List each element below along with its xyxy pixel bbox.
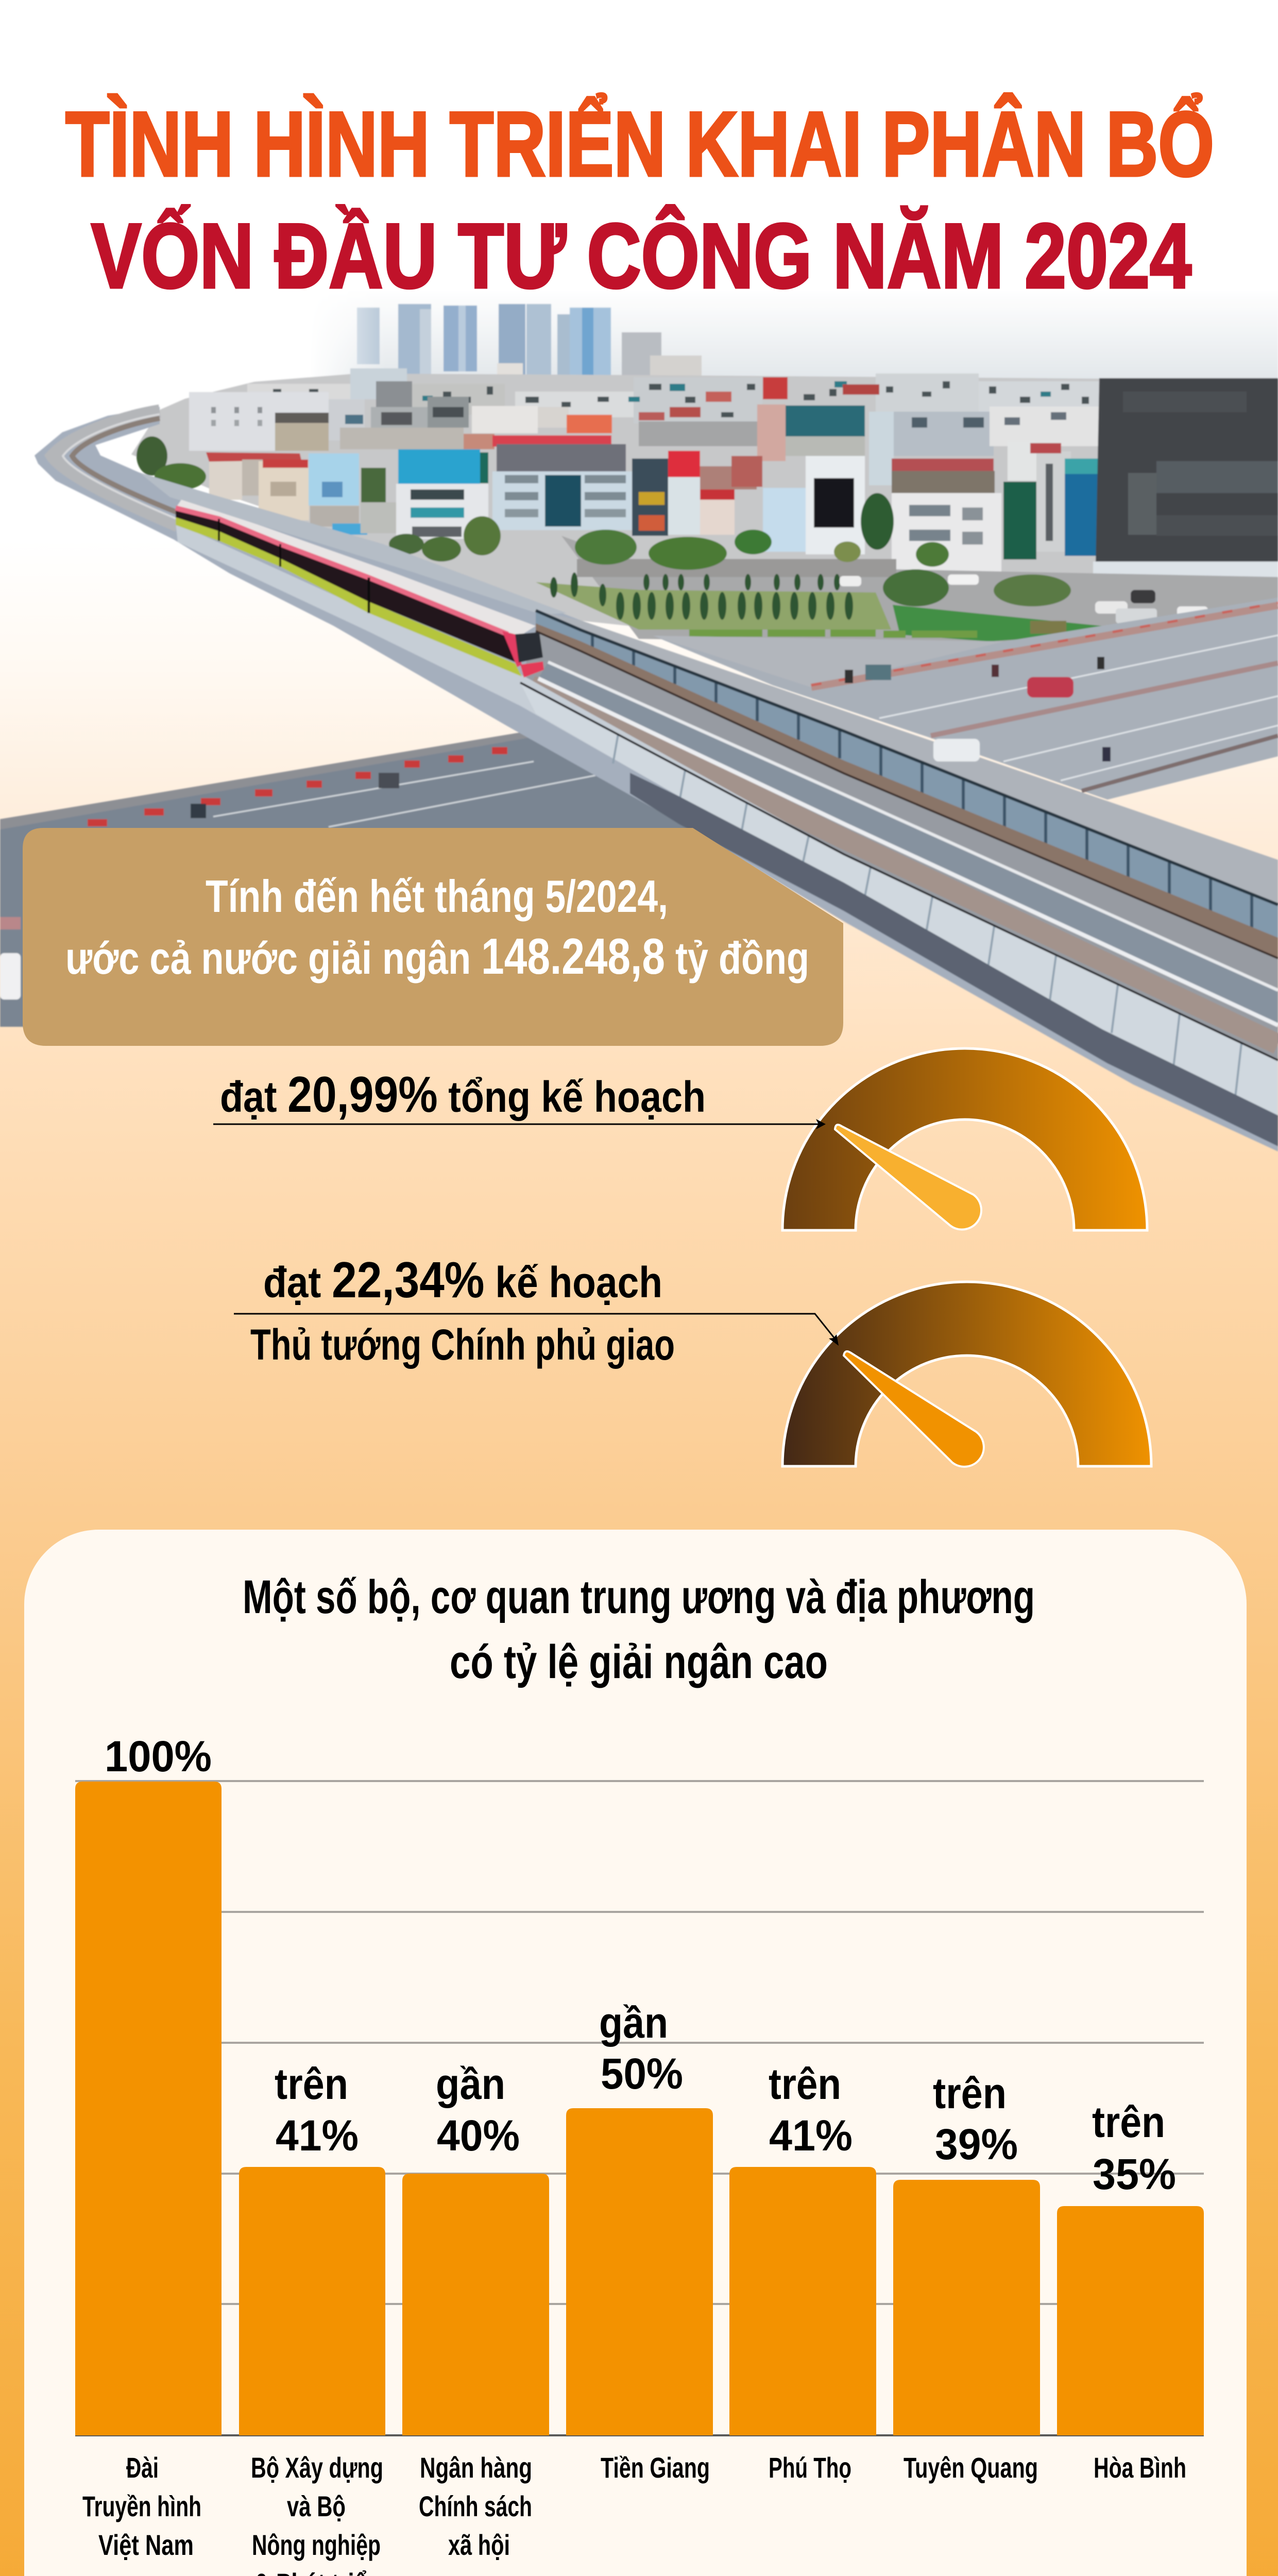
walkway [536,611,1278,905]
bar value labels: 41% [276,2111,359,2160]
bar category labels: Chính sách [419,2490,532,2522]
background blocks [350,368,407,399]
bar chart [75,1782,1204,2435]
gauge 1: 20,99%: đạt 20,99% tổng kế hoạch [220,1066,706,1123]
panel heading: có tỷ lệ giải ngân cao [450,1636,828,1688]
bar value labels [105,1732,1176,2198]
viaduct structure [35,407,1278,1151]
van on viaduct [933,739,980,761]
bar category labels: Tuyên Quang [904,2451,1038,2484]
lawn [536,582,891,630]
grey roof building [492,435,611,447]
bar category labels: Ngân hàng [420,2451,532,2484]
bar value labels: 41% [769,2111,853,2160]
summary text: Tính đến hết tháng 5/2024, [206,871,668,922]
bar value labels: gần [599,1998,668,2047]
bar value labels: trên [275,2060,348,2108]
bar category labels: Việt Nam [98,2529,194,2561]
metro train [176,500,544,677]
gauge 1: 20,99% [213,1048,1147,1230]
grid lines [75,1781,1204,2304]
street trees [464,516,501,555]
sky [309,289,1278,389]
summary text: ước cả nước giải ngân 148.248,8 tỷ đồng [65,928,809,985]
bar value labels: trên [933,2069,1007,2117]
bar category labels [82,2451,1186,2576]
right road [653,598,1278,800]
dark lower band [630,773,1278,1146]
upper window panels [536,611,1278,938]
bar value labels: 100% [105,1732,212,1781]
billboard light blue [309,453,359,505]
bar value labels: 39% [935,2120,1018,2168]
bar value labels: gần [436,2060,505,2108]
centre strip [632,459,668,536]
bar category labels: Hòa Bình [1094,2451,1186,2484]
left road under viaduct [0,732,693,1027]
left white buildings [189,392,329,451]
bar category labels: Tiền Giang [601,2451,710,2484]
low red-roof houses [209,457,242,500]
bar category labels: Phú Thọ [769,2451,851,2484]
black line [520,683,1278,1060]
panel heading [243,1571,1035,1688]
gauge 2: 22,34% [234,1251,1151,1467]
bar value labels: 40% [437,2111,520,2160]
ground [561,536,1278,644]
summary text [65,871,809,985]
bar category labels: Đài [126,2451,159,2484]
photo: metro viaduct and Hanoi city [0,283,1278,1151]
curved rails at left [53,411,178,526]
gauge 2: 22,34%: đạt 22,34% kế hoạch [263,1251,662,1308]
fence and glass wall below train [176,523,1278,1115]
bar category labels: Bộ Xây dựng [251,2451,383,2484]
title [65,93,1214,307]
billboard teal building [396,484,488,539]
panel heading: Một số bộ, cơ quan trung ương và địa phương [243,1571,1035,1623]
hedges [689,630,762,637]
bar category labels: Truyền hình [82,2490,201,2522]
bar value labels: 50% [601,2049,683,2098]
bar category labels: xã hội [448,2529,510,2561]
small roof and window details [273,381,1089,417]
bar value labels: 35% [1093,2150,1176,2198]
dark covered building [1096,378,1278,567]
bar category labels: và Bộ [287,2490,346,2522]
city mass [131,374,1278,641]
left trees [137,436,167,476]
gauge 2: 22,34%: Thủ tướng Chính phủ giao [250,1320,675,1369]
panel: summary box [23,828,843,1046]
panel: high disbursement ratios [24,1530,1247,2576]
parked cars [1095,601,1128,614]
bar category labels: Nông nghiệp [252,2529,381,2561]
bar value labels: trên [769,2060,841,2108]
bar value labels: trên [1092,2098,1165,2146]
cypress trees [550,572,853,620]
skyline towers [357,304,702,394]
tracks [520,631,1278,1060]
